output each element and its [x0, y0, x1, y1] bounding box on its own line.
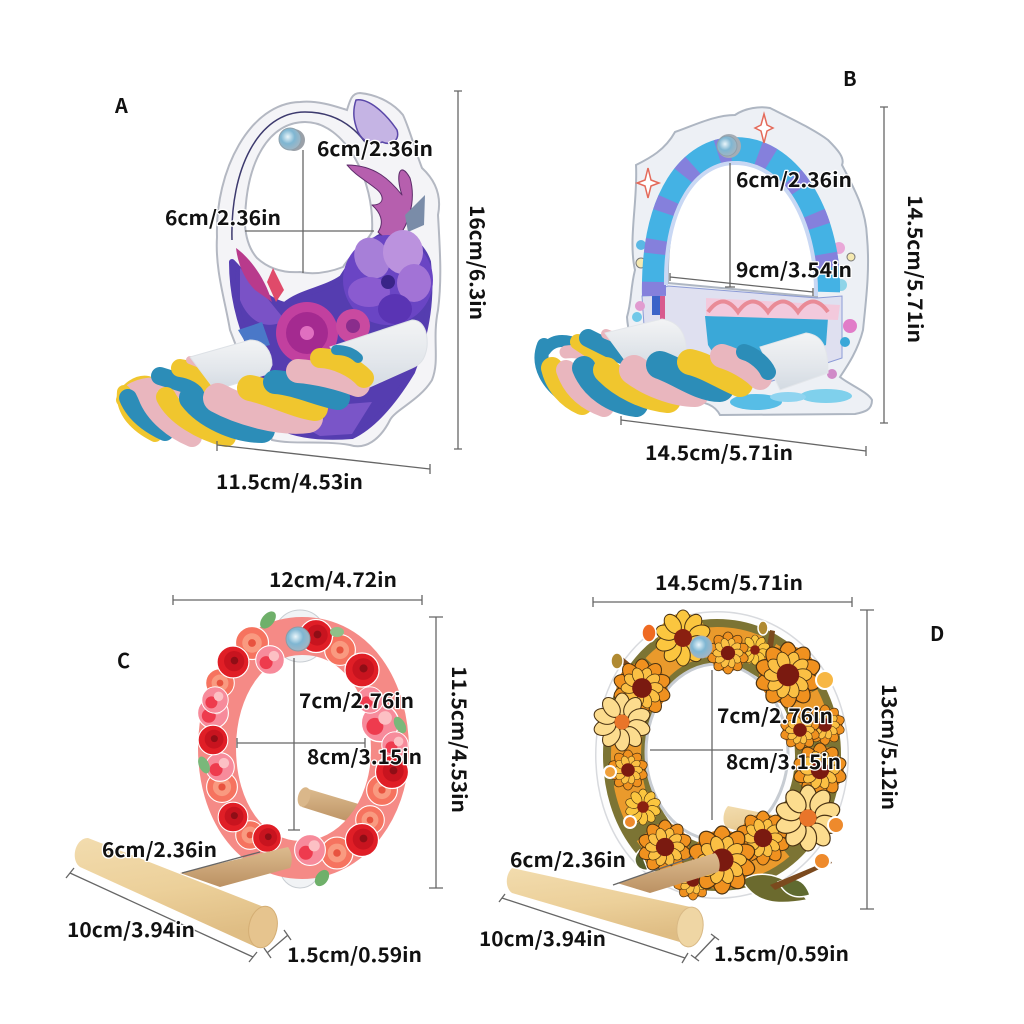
label height A: 16cm/6.3in — [464, 205, 493, 320]
bolt B — [717, 134, 741, 158]
label width B: 14.5cm/5.71in — [645, 437, 793, 466]
label D: D — [930, 618, 944, 647]
suction cup C — [274, 610, 326, 662]
perch dowel D — [617, 853, 720, 893]
bolt D — [690, 636, 712, 658]
blue arch band B — [654, 149, 828, 296]
rear rope strands B — [545, 334, 626, 370]
label height B: 14.5cm/5.71in — [902, 195, 931, 343]
label 6cm left A: 6cm/2.36in — [165, 202, 281, 231]
label height D: 13cm/5.12in — [876, 684, 905, 810]
wreath backing D — [626, 642, 818, 868]
panel B: blue arch perch — [541, 63, 931, 466]
label 8cm D: 8cm/3.15in — [726, 746, 841, 775]
label diameter D: 1.5cm/0.59in — [714, 938, 849, 967]
label 6cm top A: 6cm/2.36in — [317, 133, 433, 162]
ring inlay line A — [232, 112, 365, 240]
rear dowel D — [724, 806, 778, 840]
label 8cm C: 8cm/3.15in — [307, 741, 422, 770]
decorative stage B — [632, 240, 857, 410]
label 7cm C: 7cm/2.76in — [299, 685, 414, 714]
panel A: purple floral perch — [114, 90, 493, 495]
label width C: 12cm/4.72in — [269, 564, 397, 593]
perch dowel C — [180, 847, 292, 887]
acrylic frame A — [217, 93, 440, 446]
acrylic frame B — [627, 107, 872, 415]
label crossbar C: 10cm/3.94in — [67, 914, 195, 943]
label width A: 11.5cm/4.53in — [216, 466, 363, 495]
label 7cm D: 7cm/2.76in — [717, 700, 833, 729]
label width D: 14.5cm/5.71in — [655, 567, 803, 596]
dimension lines C — [66, 595, 443, 962]
tube left A — [190, 340, 272, 390]
dimension lines A — [217, 91, 462, 474]
rope B — [541, 345, 768, 407]
label 9cm B: 9cm/3.54in — [736, 254, 852, 283]
label perch D: 6cm/2.36in — [510, 844, 626, 873]
label crossbar D: 10cm/3.94in — [479, 923, 606, 952]
bolt C — [286, 627, 310, 651]
tube right B — [760, 333, 828, 390]
rear dowel C — [296, 786, 362, 824]
rose wreath C — [196, 608, 409, 889]
dimension lines B — [621, 107, 888, 456]
mirror hole D — [646, 664, 788, 840]
lower suction cup C — [280, 848, 320, 888]
label A: A — [114, 90, 128, 119]
panel D: orange sunflower wreath perch — [479, 567, 944, 967]
bolt A — [279, 128, 305, 151]
label 6cm B: 6cm/2.36in — [736, 164, 852, 193]
rear rope strands A — [122, 360, 212, 400]
crossbar dowel C — [75, 838, 281, 950]
panel C: red rose wreath perch — [66, 564, 475, 968]
floral artwork A — [232, 100, 433, 437]
rope A — [124, 350, 364, 437]
label height C: 11.5cm/4.53in — [446, 666, 475, 813]
label C: C — [117, 645, 130, 674]
dimension lines D — [499, 597, 874, 963]
label perch C: 6cm/2.36in — [102, 834, 217, 863]
crossbar dowel D — [507, 868, 706, 949]
label B: B — [843, 63, 857, 92]
sparkle icons B — [637, 114, 773, 198]
tube right A — [330, 320, 427, 390]
label diameter C: 1.5cm/0.59in — [287, 939, 422, 968]
tube left B — [605, 319, 686, 367]
sunflower artwork D — [592, 610, 848, 903]
